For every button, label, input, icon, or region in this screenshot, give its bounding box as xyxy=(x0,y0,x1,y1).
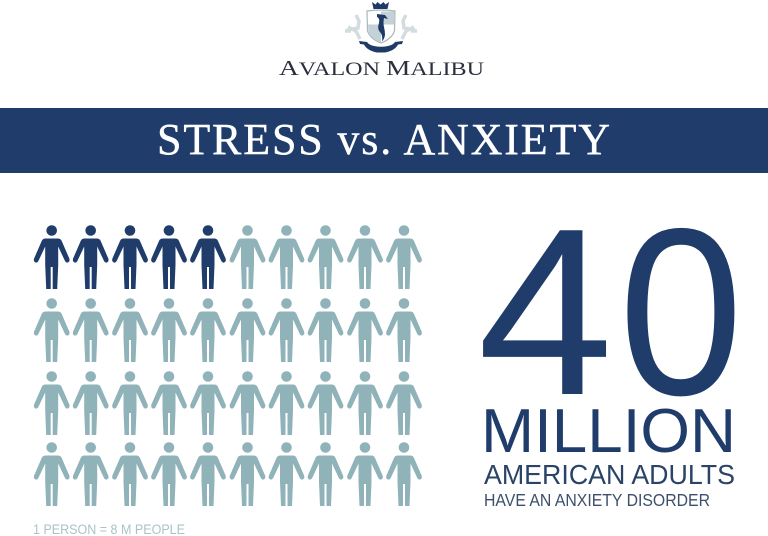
icon: right supporter xyxy=(402,15,417,39)
big number: 40 xyxy=(478,179,743,445)
logo: Avalon Malibu crest xyxy=(279,2,484,80)
icon: crown xyxy=(372,2,389,9)
title: STRESS vs. ANXIETY xyxy=(157,115,610,164)
statistic: have an anxiety disorder: HAVE AN ANXIETY DISORDER xyxy=(484,490,710,510)
title banner xyxy=(0,108,768,173)
highlighted people row xyxy=(34,225,226,289)
pictogram: 40 people, 5 highlighted xyxy=(34,225,422,506)
icon: shield xyxy=(367,10,395,43)
icon: ribbon xyxy=(359,41,403,52)
icon: left supporter xyxy=(345,15,360,39)
big number: 40: 4 xyxy=(478,180,613,445)
big number: 40: 0 xyxy=(619,179,743,444)
statistic: American adults: AMERICAN ADULTS xyxy=(484,459,735,490)
icon: seahorse xyxy=(377,14,388,41)
logo wordmark: AVALON M ALIBU xyxy=(279,56,484,80)
statistic: MILLION: MILLION xyxy=(481,397,736,466)
